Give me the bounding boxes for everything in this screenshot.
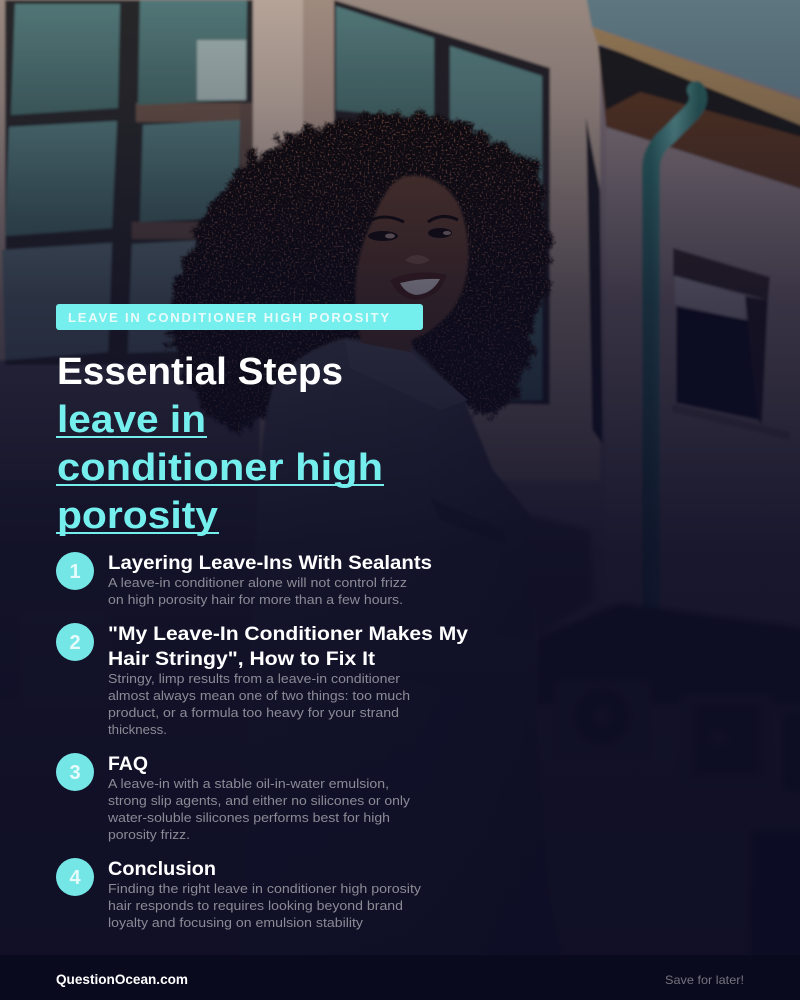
step 2 xyxy=(56,623,468,737)
step 2 text: almost always mean one of two things: too much xyxy=(108,688,410,703)
step 2 text: Stringy, limp results from a leave-in conditioner xyxy=(108,671,401,686)
downpipe xyxy=(651,90,698,630)
shirt and body xyxy=(240,338,565,970)
upper window with frame xyxy=(334,0,550,405)
step 4 text xyxy=(108,881,422,930)
face and neck xyxy=(355,176,468,372)
pocket flap xyxy=(430,498,505,545)
number badge 3: 3 xyxy=(69,762,81,784)
step 1 text: A leave-in conditioner alone will not control frizz xyxy=(108,575,407,590)
step 2 text xyxy=(108,671,410,737)
step 2 heading: "My Leave-In Conditioner Makes My xyxy=(108,624,468,645)
number badge 4 xyxy=(56,858,94,896)
step 1 text xyxy=(108,575,407,607)
step 2 heading xyxy=(108,624,468,670)
site name: QuestionOcean.com xyxy=(56,972,188,987)
step 3 text: strong slip agents, and either no silicones or only xyxy=(108,793,411,808)
title xyxy=(56,351,384,537)
lower shadow band and air conditioners xyxy=(20,510,800,1000)
badge: LEAVE IN CONDITIONER HIGH POROSITY xyxy=(68,310,389,325)
right wall xyxy=(606,127,800,700)
step 3 text xyxy=(107,776,411,842)
number badge 3 xyxy=(56,753,94,791)
step 4 text: loyalty and focusing on emulsion stability xyxy=(108,915,364,930)
number badge 2: 2 xyxy=(69,632,81,654)
step 3 text: water-soluble silicones performs best for high xyxy=(107,810,390,825)
title highlight: leave in xyxy=(57,399,206,441)
number badge 1 xyxy=(56,552,94,590)
collar xyxy=(345,340,468,410)
step 3 xyxy=(56,753,411,842)
step 2 text: product, or a formula too heavy for your strand xyxy=(108,705,399,720)
step 3 text: porosity frizz. xyxy=(108,827,190,842)
step 3 heading: FAQ xyxy=(108,754,148,775)
title: Essential Steps xyxy=(57,351,343,393)
belt xyxy=(400,625,535,710)
title highlight: conditioner high xyxy=(57,447,383,489)
step 1 text: on high porosity hair for more than a few hours. xyxy=(108,592,403,607)
step 4 xyxy=(56,858,422,930)
step 4 heading: Conclusion xyxy=(108,859,216,880)
number badge 1: 1 xyxy=(69,561,81,583)
step 2 text: thickness. xyxy=(108,722,167,737)
save note: Save for later! xyxy=(665,973,744,987)
step 2 heading: Hair Stringy", How to Fix It xyxy=(108,649,376,670)
eyes and smile xyxy=(368,216,458,300)
woman xyxy=(171,114,565,970)
number badge 4: 4 xyxy=(69,867,81,889)
footer xyxy=(0,955,800,1000)
badge xyxy=(56,304,423,330)
title highlight xyxy=(56,399,384,537)
title highlight: porosity xyxy=(57,495,218,537)
number badge 2 xyxy=(56,623,94,661)
step 1 heading: Layering Leave-Ins With Sealants xyxy=(108,553,432,574)
step 3 text: A leave-in with a stable oil-in-water emulsion, xyxy=(108,776,389,791)
roof soffit and gutter xyxy=(592,27,800,195)
left window frame xyxy=(2,0,335,365)
right window xyxy=(672,248,790,440)
hair xyxy=(171,114,548,429)
step 1 xyxy=(56,552,432,607)
dark corner slit xyxy=(586,118,603,445)
sky xyxy=(583,0,800,104)
step 4 text: hair responds to requires looking beyond brand xyxy=(108,898,403,913)
step 4 text: Finding the right leave in conditioner high porosity xyxy=(108,881,422,896)
